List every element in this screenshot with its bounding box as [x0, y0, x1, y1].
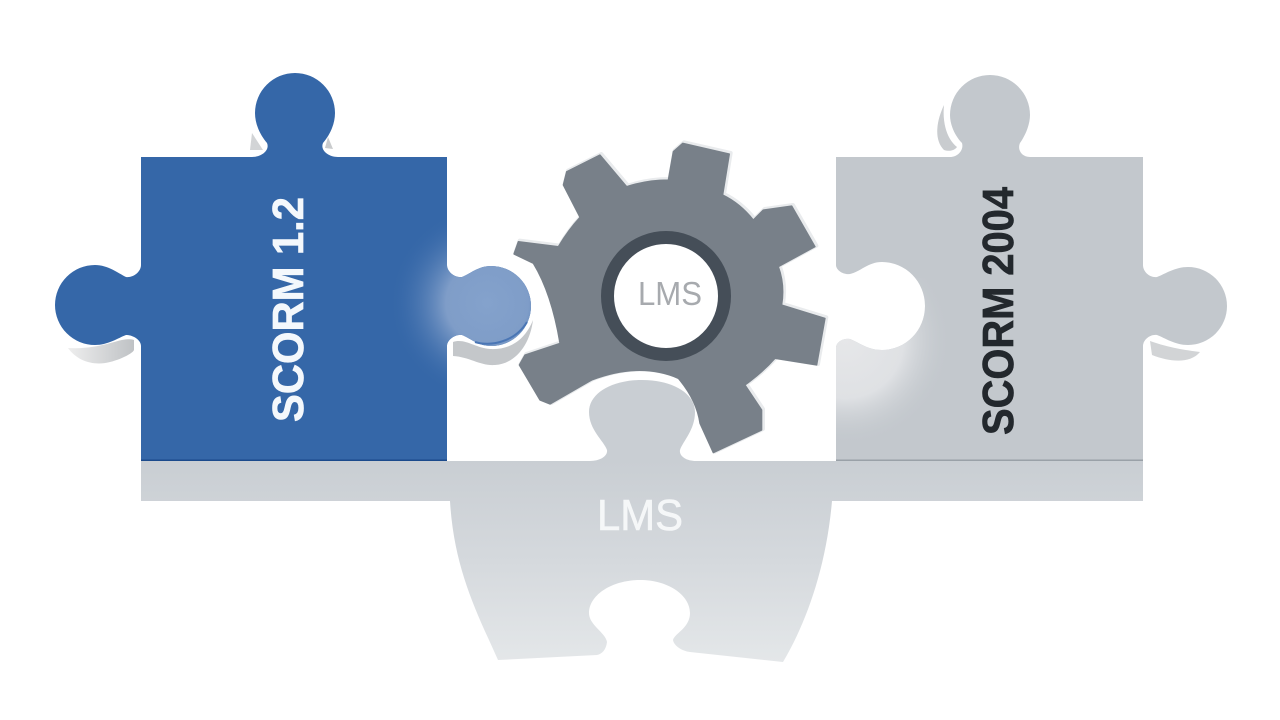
panel: SCORM 1.2 puzzle piece — [55, 73, 550, 462]
label: LMS: LMS — [597, 491, 683, 540]
label: LMS: LMS — [638, 275, 702, 312]
highlight on lower left — [836, 321, 925, 420]
label: SCORM 1.2: SCORM 1.2 — [264, 197, 313, 422]
gear hub ring — [608, 238, 724, 354]
base shape — [141, 380, 1143, 662]
blue puzzle shape — [55, 73, 531, 461]
bottom edge line — [141, 460, 447, 462]
diagram: SCORM puzzle pieces and LMS gear — [55, 73, 1227, 662]
icon: LMS gear — [514, 142, 826, 453]
shadow: gray piece edges — [937, 105, 1200, 361]
panel: SCORM 2004 puzzle piece — [836, 75, 1227, 461]
bottom edge line — [836, 460, 1143, 461]
gear body — [514, 142, 826, 453]
gray puzzle shape — [836, 75, 1227, 461]
shadow: blue piece edges — [68, 133, 533, 365]
highlight on right knob — [408, 235, 531, 370]
knob rim — [475, 322, 527, 344]
label: SCORM 2004: SCORM 2004 — [974, 187, 1023, 435]
